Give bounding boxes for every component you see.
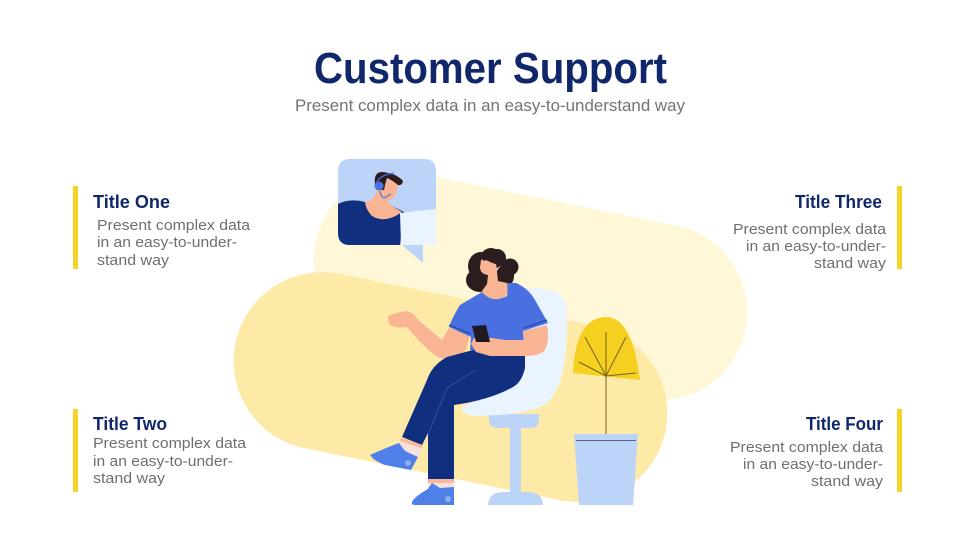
block: title four <box>730 409 902 492</box>
body text: Present complex data <box>93 435 247 452</box>
icon: speech bubble with support agent <box>338 159 436 263</box>
jeans <box>402 350 525 479</box>
fringe <box>483 255 498 265</box>
title: Customer Support <box>314 44 667 93</box>
back shoe <box>370 443 418 470</box>
background pill: light <box>298 156 763 416</box>
background pill: darker <box>218 256 683 518</box>
leaf <box>573 317 640 380</box>
agent hair <box>375 172 403 190</box>
body text: stand way <box>97 252 170 269</box>
illustration: woman seated with phone <box>370 248 548 505</box>
front shoe <box>412 483 454 505</box>
accent bar <box>897 409 902 492</box>
heading: Title Four <box>806 414 883 434</box>
heading: Title Three <box>795 192 882 212</box>
block: title three <box>733 186 902 272</box>
body text: in an easy-to-under- <box>746 238 886 255</box>
body text <box>97 217 251 269</box>
front sock <box>428 479 454 490</box>
body text <box>93 435 247 487</box>
accent bar <box>897 186 902 269</box>
body text: stand way <box>814 255 887 272</box>
pot <box>574 434 638 505</box>
body text <box>733 221 887 272</box>
neck and face <box>480 258 508 302</box>
body text: in an easy-to-under- <box>743 456 883 473</box>
body text: stand way <box>93 470 166 487</box>
hair <box>466 248 518 292</box>
headset <box>374 182 384 190</box>
body text: stand way <box>811 473 884 490</box>
far arm and hand <box>388 311 470 358</box>
subtitle: Present complex data in an easy-to-understand way <box>295 96 685 115</box>
shirt <box>449 283 548 355</box>
agent body <box>338 200 404 245</box>
body text: in an easy-to-under- <box>97 234 237 251</box>
stem and veins <box>579 332 636 434</box>
block: title one <box>73 186 251 269</box>
illustration: stool <box>462 288 567 505</box>
heading: Title One <box>93 192 170 212</box>
agent neck and face <box>365 178 402 219</box>
body text: in an easy-to-under- <box>93 453 233 470</box>
accent bar <box>73 186 78 269</box>
heading: Title Two <box>93 414 167 434</box>
phone <box>472 325 490 342</box>
near arm <box>471 325 548 356</box>
accent bar <box>73 409 78 492</box>
body text: Present complex data <box>97 217 251 234</box>
back sock <box>395 439 423 462</box>
body text: Present complex data <box>730 439 884 456</box>
illustration: potted plant <box>573 317 640 505</box>
block: title two <box>73 409 247 492</box>
body text: Present complex data <box>733 221 887 238</box>
body text <box>730 439 884 490</box>
